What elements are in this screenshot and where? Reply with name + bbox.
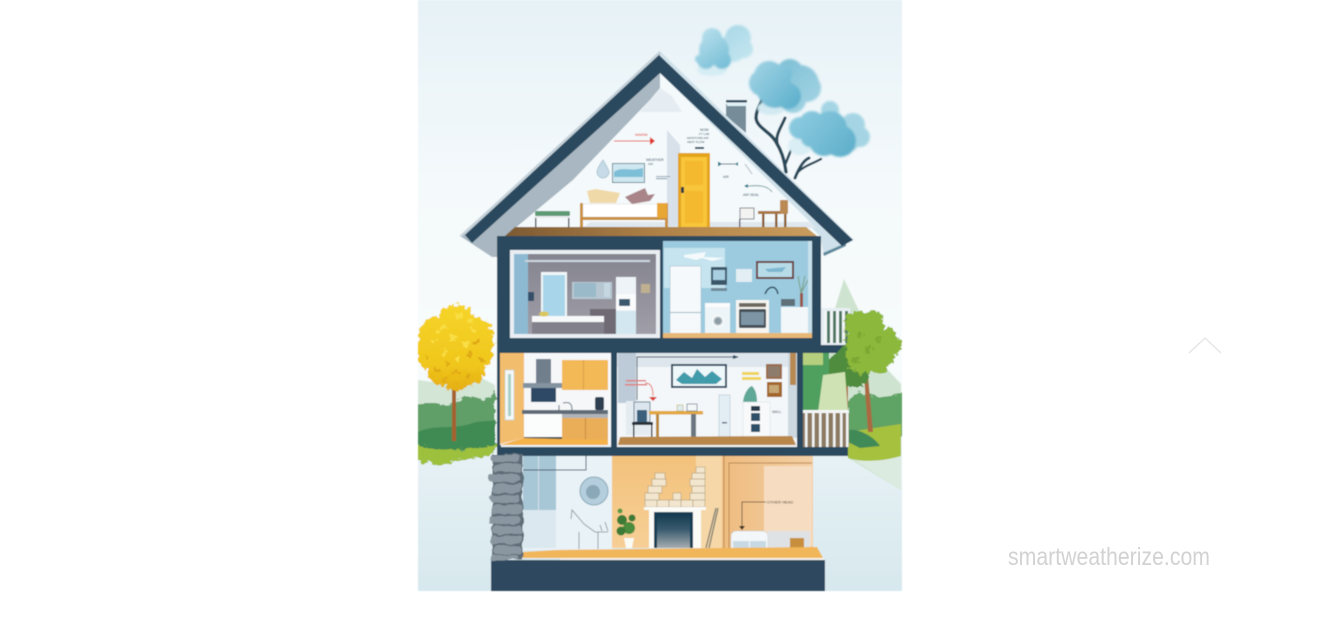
framed picture [756,261,794,279]
roof [460,51,854,257]
door [678,153,710,227]
canopy green dark [828,345,870,388]
panorama picture [671,364,727,388]
fireplace [644,507,706,548]
stove cabinet [743,402,770,438]
trunk [452,385,456,441]
bushes dark [418,420,495,450]
roof dark beam [465,55,853,246]
left yellow tree and garden [414,304,495,464]
dining table [649,404,703,438]
bushes light [414,392,495,450]
white floor edge [560,558,824,560]
red label and arrow [625,380,657,401]
airflow arrows and small labels: AIR [648,162,654,166]
floor strip [663,333,812,338]
cabinet and vase [781,276,808,333]
right room wall [722,456,813,548]
airflow arrows and small labels: AIR SEAL [743,193,759,197]
window [572,282,612,299]
scene group [414,0,906,591]
wall panel [626,401,650,435]
canopy [417,304,494,391]
small wall label: WALL [772,410,781,414]
foundation [491,560,825,591]
fridge [670,266,701,334]
washer [705,303,730,333]
railing [803,410,849,447]
basement floor [520,547,823,558]
attic interior wall [507,73,816,235]
upper balcony [821,308,850,346]
red airflow arrow [614,132,655,145]
grey panel [768,531,810,549]
airflow arrows and small labels: FT LAB [699,132,709,136]
pale hill [418,378,496,420]
kitchen island [532,312,604,334]
callout arrow and label [739,500,793,530]
attic room [505,128,817,236]
roof outer trim and left grey band [460,51,660,257]
airflow arrows and small labels: MOISTURE AIR [687,136,709,140]
canopy lime [844,311,902,375]
floor [500,438,608,445]
middle floor living room [617,353,797,447]
faint chevron icon [1189,338,1221,353]
slim fridge [719,395,730,438]
fridge [616,277,636,334]
upper right room [663,241,812,338]
range hood and oven [523,359,562,402]
upper ceiling shade [640,88,682,112]
middle floor kitchen [497,353,612,447]
callout arrow and label: OTHER HEAD [767,500,793,504]
floor slab above basement [497,447,848,459]
basement [520,456,824,560]
lower wall shade [583,222,816,228]
roof right trim and soffit [660,51,854,256]
chair and appliance [632,402,653,438]
red airflow arrow: WARM [635,132,648,137]
kettle [595,397,604,410]
infographic scene [417,0,1222,592]
grass [848,392,906,435]
wall picture [612,163,645,183]
oven [736,300,769,335]
upper left room [510,250,660,338]
airflow arrows and small labels [646,128,772,197]
bed [580,188,668,227]
tree branches [756,95,821,178]
cloud small [695,25,753,76]
fire tools [706,508,718,548]
upper floor walls [497,236,821,353]
airflow arrows and small labels: VENT FLOW [687,140,705,144]
orange room wall [612,456,724,548]
airflow arrows and small labels: WEATHER [646,158,664,162]
door [541,272,567,319]
counter [522,410,608,440]
wall sconce [528,292,534,301]
potted plant [616,508,636,548]
right pale hill [822,279,901,490]
lime lawn [848,424,901,461]
left utility room [523,456,613,550]
lower balcony garden view [803,353,849,447]
lawn [414,444,495,464]
duct arrow [637,355,739,400]
faucet [559,403,572,410]
attic floor [505,227,817,236]
desk and lamp [571,510,608,549]
chimney [726,100,747,133]
right wall of middle floor [797,353,803,447]
yellow note [742,372,761,380]
small picture [711,267,727,291]
furnace unit [731,531,768,551]
paper note [736,269,752,282]
plant [743,386,757,402]
airflow arrows and small labels: AIR [723,175,729,179]
wall panel [641,284,650,293]
sky background panel [418,0,902,591]
side table and chair [739,200,788,227]
small box [790,538,804,550]
floor [618,436,796,445]
icon: water drop [597,160,609,178]
cloud middle [749,59,821,115]
trunks [846,378,874,432]
airflow arrows and small labels: NOW [700,128,709,132]
trim edge left [461,52,660,236]
faucet [765,287,778,294]
right green trees and garden [828,309,903,462]
door side wall [667,130,680,226]
dark shrub [848,430,880,448]
brown frames [766,364,782,397]
central divider [611,353,617,447]
clouds and bare tree [695,25,870,178]
stone wall [489,454,523,560]
bench [534,211,570,227]
stove [590,309,616,334]
upper cabinets [562,360,608,390]
cloud large [788,101,870,157]
brick chimney breast [645,467,705,507]
watermark text: smartweatherize.com [1008,543,1210,571]
middle floor walls [497,345,848,353]
wall dial [580,477,608,505]
